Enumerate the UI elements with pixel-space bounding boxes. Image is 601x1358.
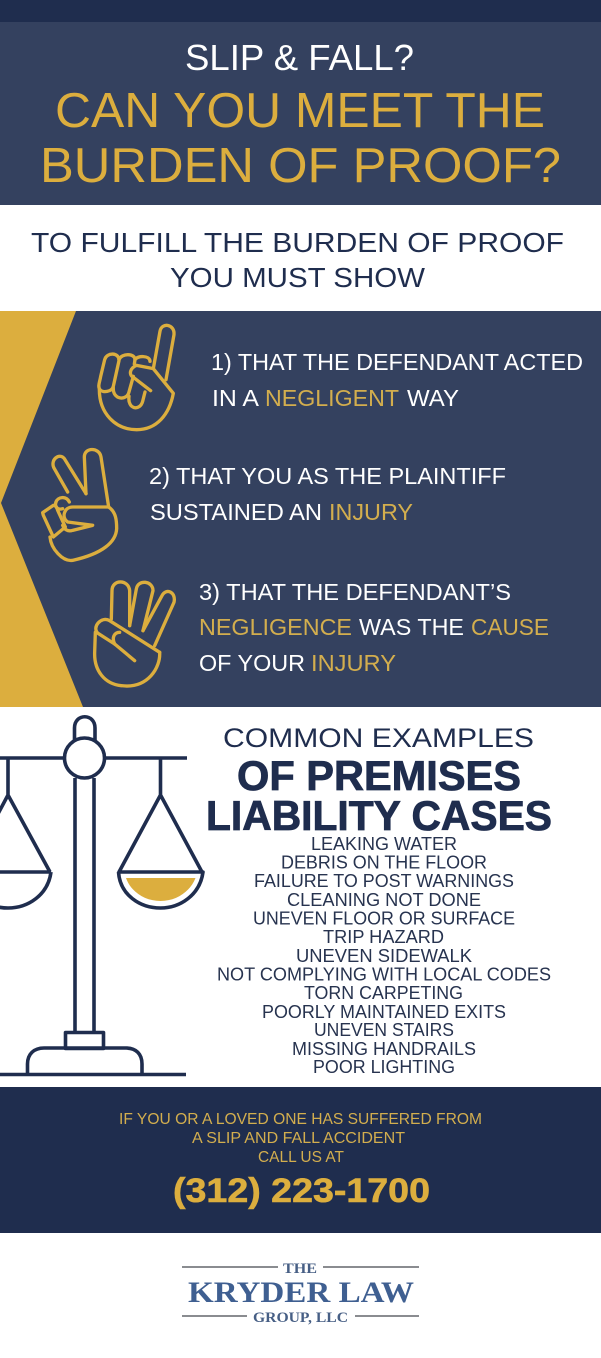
list: premises liability examples: NOT COMPLYING WITH LOCAL CODES [217,964,551,984]
heading: common examples: COMMON EXAMPLES [223,723,534,753]
base block [66,1032,104,1048]
logo: the kryder law group [182,1261,419,1326]
list: premises liability examples: UNEVEN STAIRS [314,1020,454,1040]
panel: call to action [0,1087,601,1233]
heading: common examples [206,723,552,839]
requirement three text: CAUSE [471,614,549,640]
list: premises liability examples: FAILURE TO POST WARNINGS [254,871,514,891]
requirement two text: INJURY [329,499,413,525]
requirement one text: NEGLIGENT [265,385,399,411]
gold fill in right pan [126,878,196,901]
list: premises liability examples: POORLY MAINTAINED EXITS [262,1002,506,1022]
header background [0,22,601,205]
requirement two text [149,463,506,525]
top dark band [0,0,601,22]
phone number: (312) 223-1700 [173,1172,430,1210]
subheading: YOU MUST SHOW [170,262,426,293]
requirement three text [199,579,549,676]
requirement one text: IN A [212,385,259,411]
logo text kryder law: KRYDER LAW [188,1276,414,1309]
list: premises liability examples: MISSING HANDRAILS [292,1039,476,1059]
gold chevron [0,311,83,707]
call to action text [119,1111,482,1166]
list: premises liability examples: DEBRIS ON THE FLOOR [281,852,487,872]
requirement one text: 1) THAT THE DEFENDANT ACTED [211,349,583,375]
subheading: TO FULFILL THE BURDEN OF PROOF [31,227,564,258]
heading: common examples: LIABILITY CASES [206,792,552,839]
banner background [0,1087,601,1233]
icon: hand two fingers [43,449,117,560]
icon: hand one finger [99,325,174,430]
panel: three requirements [0,311,601,707]
requirement three text: WAS THE [359,614,464,640]
requirement two text: 2) THAT YOU AS THE PLAINTIFF [149,463,506,489]
pillar [75,778,94,1033]
requirement one text: WAY [407,385,459,411]
heading: common examples: OF PREMISES [237,752,521,799]
logo text the: THE [283,1261,317,1277]
list: premises liability examples: CLEANING NOT DONE [287,890,481,910]
requirement two text: SUSTAINED AN [150,499,322,525]
call to action text: A SLIP AND FALL ACCIDENT [192,1130,405,1147]
left pan [0,758,51,908]
right pan [118,758,203,908]
title line one: CAN YOU MEET THE [55,84,545,138]
subheading [31,227,564,293]
list: premises liability examples: UNEVEN FLOOR OR SURFACE [253,908,515,928]
requirement three text: 3) THAT THE DEFENDANT’S [199,579,511,605]
heading: slip and fall: SLIP & FALL? [185,37,414,78]
requirement three text: NEGLIGENCE [199,614,352,640]
list: premises liability examples: TORN CARPETING [304,983,463,1003]
panel background [0,311,601,707]
base dome [28,1048,142,1074]
list: premises liability examples: TRIP HAZARD [323,927,444,947]
panel: header [0,0,601,205]
icon: hand three fingers [95,582,174,686]
title line two: BURDEN OF PROOF? [40,139,561,193]
list: premises liability examples: POOR LIGHTING [313,1057,455,1077]
requirement three text: OF YOUR [199,650,305,676]
call to action text: IF YOU OR A LOVED ONE HAS SUFFERED FROM [119,1111,482,1128]
beam [0,756,187,760]
icon: balance scales [0,717,203,1074]
logo rules [182,1267,419,1316]
logo text group llc: GROUP, LLC [253,1310,348,1326]
call to action text: CALL US AT [258,1149,344,1166]
pivot circle [64,738,104,778]
top loop [74,717,95,740]
requirement one text [211,349,583,411]
list: premises liability examples [217,834,551,1077]
list: premises liability examples: UNEVEN SIDEWALK [296,946,472,966]
list: premises liability examples: LEAKING WATER [311,834,457,854]
ground line [0,1073,186,1076]
requirement three text: INJURY [311,650,396,676]
